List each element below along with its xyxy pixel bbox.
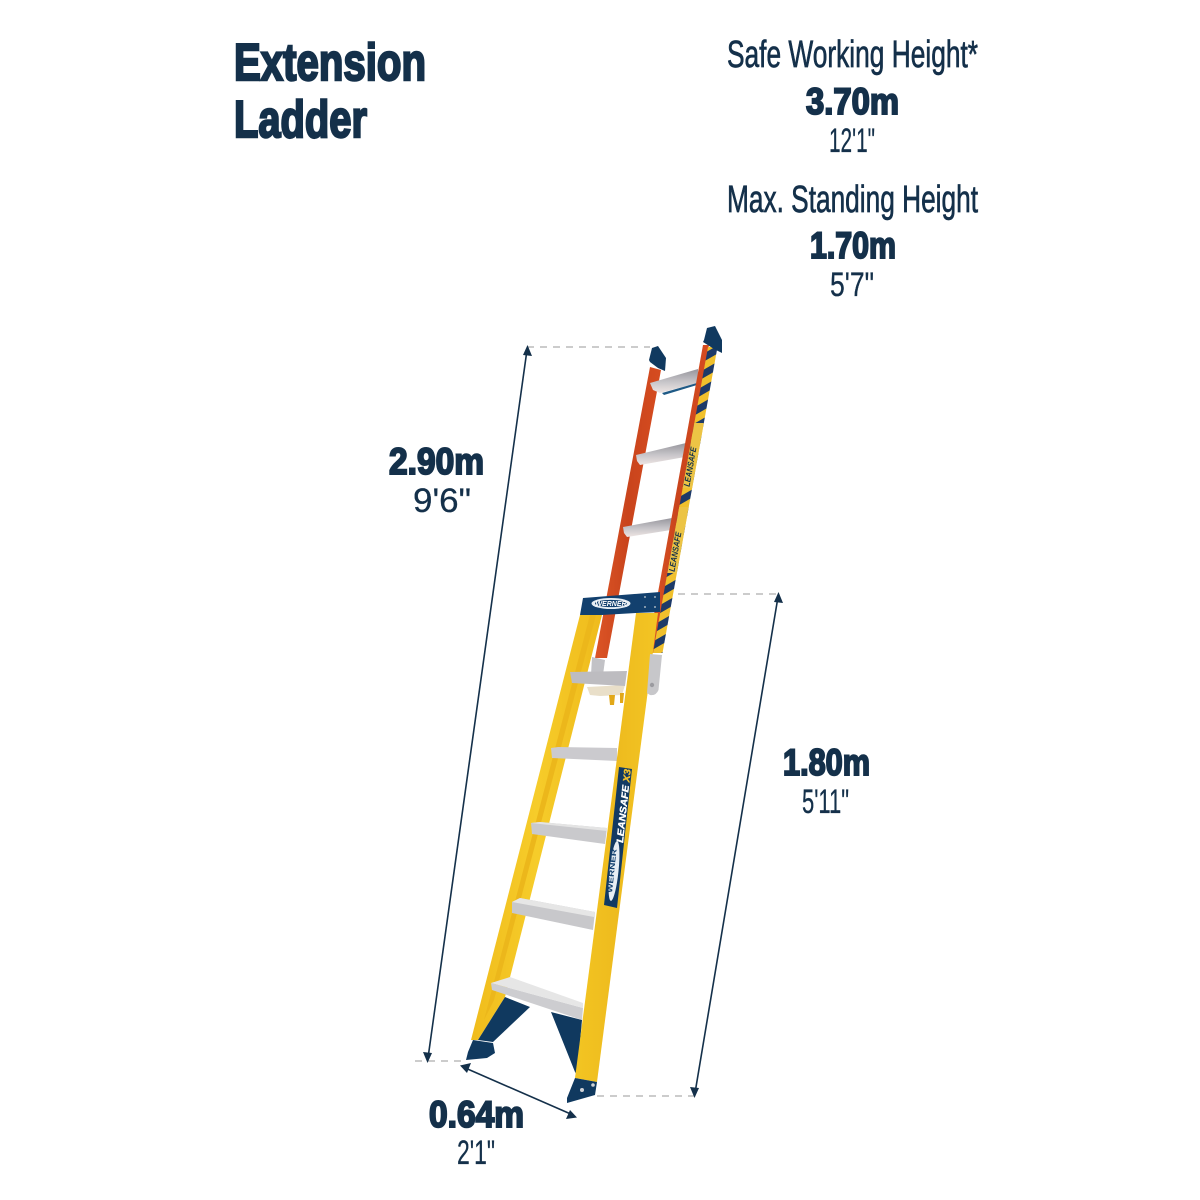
- spec: max standing height: Max. Standing Height: [727, 179, 978, 221]
- spec: safe working height: 12'1": [829, 122, 875, 160]
- rail label: WERNER: [607, 849, 619, 893]
- dimension: base height 1.80m: 1.80m: [783, 742, 870, 783]
- base left rail: [471, 615, 602, 1040]
- dimension: base width 0.64m: 2'1": [457, 1134, 495, 1172]
- dimension: total length 2.90m: [389, 345, 650, 1063]
- dimension: base width 0.64m: 0.64m: [429, 1094, 524, 1135]
- rear hinge and lock: [587, 657, 625, 705]
- front foot: [567, 1078, 597, 1103]
- top cap with Werner logo: WERNER: [595, 601, 627, 608]
- safety band: hazard stripes and labels: LEANSAFE: [682, 446, 698, 487]
- dimension: total length 2.90m: 2.90m: [389, 441, 484, 482]
- base brace front: [551, 1012, 582, 1075]
- extension top caps: [703, 326, 722, 353]
- extension right rail: [647, 345, 709, 653]
- spec: max standing height: 5'7": [830, 266, 874, 304]
- spec: max standing height: 1.70m: [810, 225, 896, 266]
- base right rail: [575, 613, 658, 1082]
- dimension: base height 1.80m: [597, 592, 870, 1098]
- ladder illustration: [466, 326, 722, 1103]
- title: Extension: [234, 34, 426, 92]
- spec: safe working height: 3.70m: [806, 81, 899, 122]
- rail label: LEANSAFE X3: [615, 768, 634, 843]
- safety band: hazard stripes and labels: [653, 347, 718, 653]
- base treads: [491, 671, 627, 1020]
- dimension: base width 0.64m: [429, 1063, 577, 1172]
- dimension: total length 2.90m: 9'6": [413, 482, 471, 520]
- base brace rear: [478, 997, 530, 1042]
- title: [234, 34, 426, 149]
- spec: safe working height: [727, 34, 978, 160]
- dimension: base height 1.80m: 5'11": [802, 783, 849, 821]
- title: Ladder: [234, 91, 367, 149]
- extension left rail: [595, 367, 661, 658]
- spec: max standing height: [727, 179, 978, 304]
- safety band: hazard stripes and labels: LEANSAFE: [667, 531, 683, 572]
- spec: safe working height: Safe Working Height*: [727, 34, 978, 76]
- rail label: [604, 767, 634, 908]
- foot rear: [466, 1040, 495, 1060]
- extension rungs: [623, 369, 698, 537]
- top cap with Werner logo: [580, 592, 660, 615]
- hinge plate: [647, 654, 662, 695]
